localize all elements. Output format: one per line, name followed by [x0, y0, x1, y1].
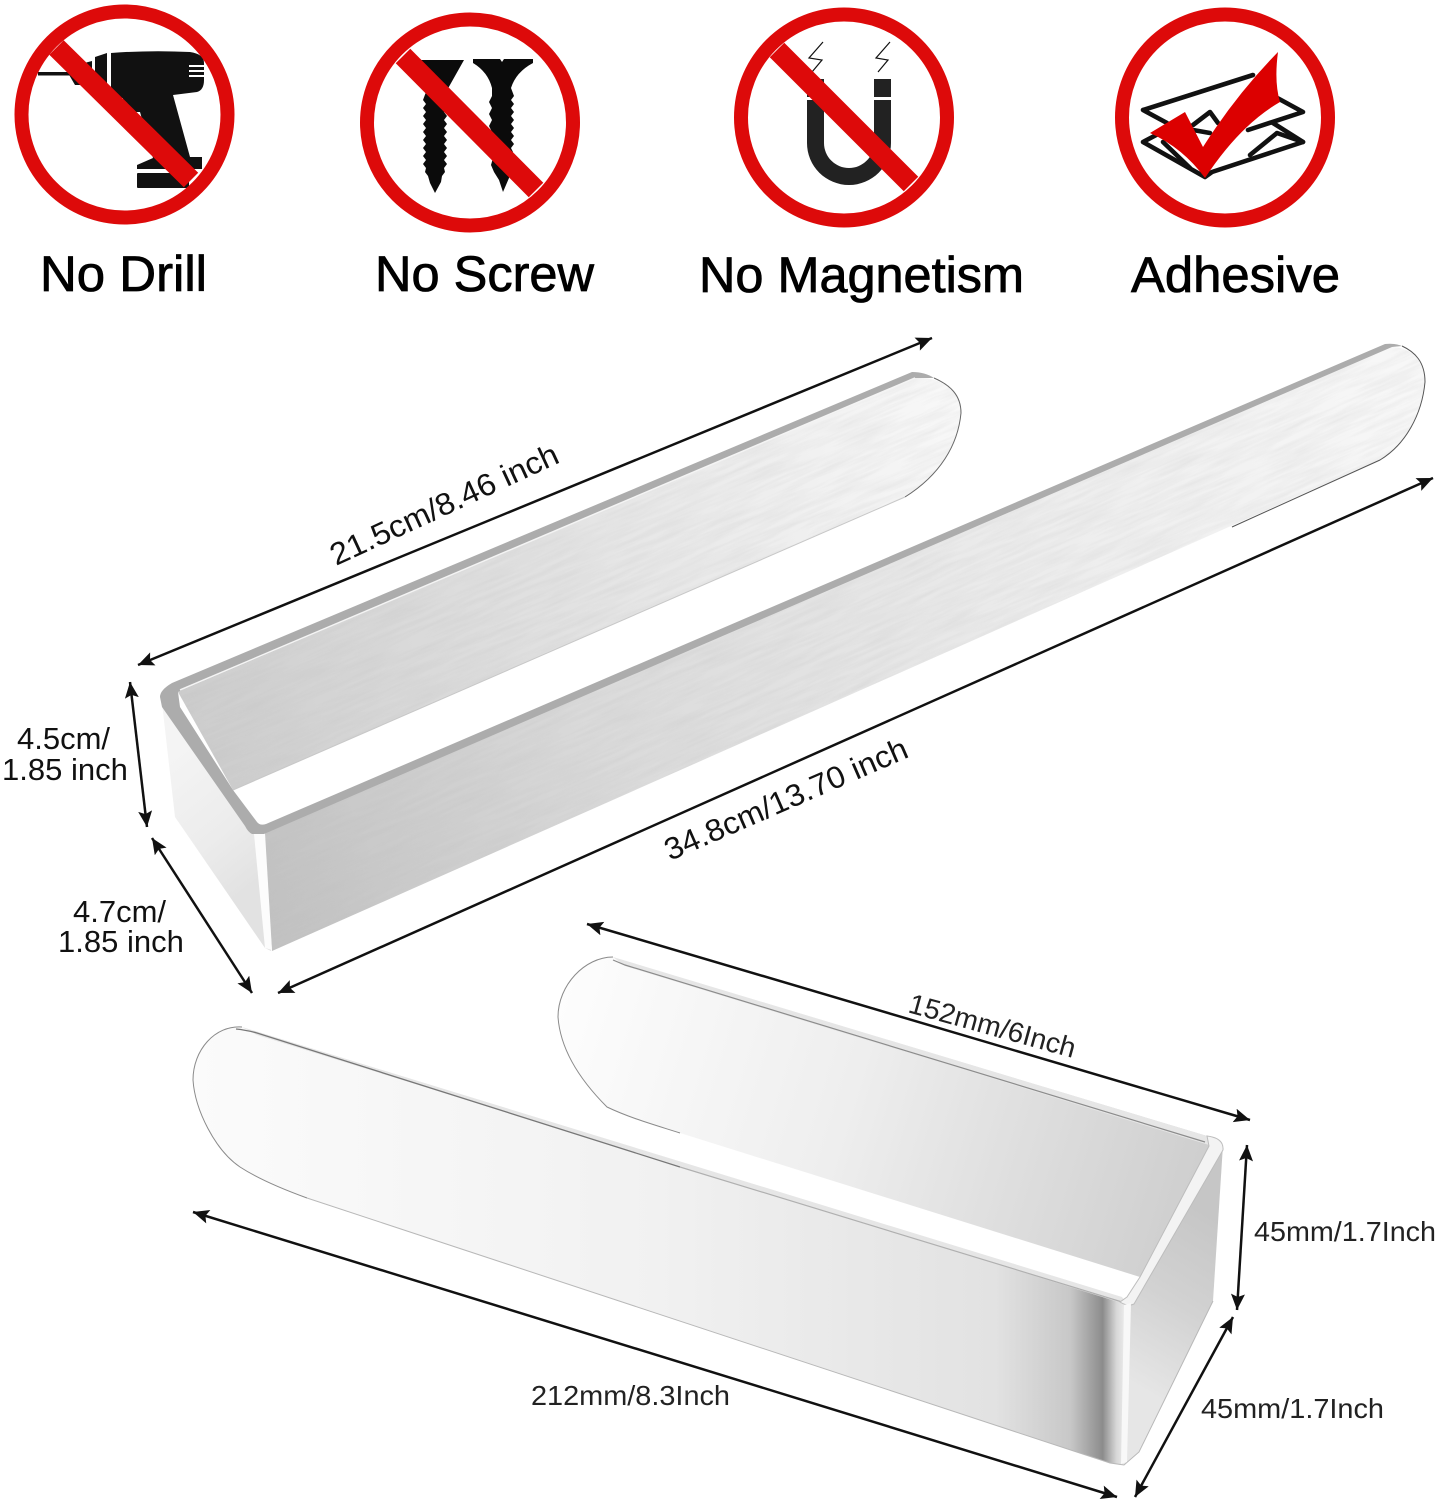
icon: no magnetism	[741, 14, 947, 220]
red ring	[1122, 14, 1328, 220]
label: No Screw: No Screw	[375, 246, 595, 302]
right rim band	[1120, 1136, 1223, 1305]
red prohibition ring	[22, 12, 228, 218]
red slash	[56, 48, 191, 180]
back plate rim	[613, 957, 1209, 1145]
red slash	[403, 56, 536, 190]
left screw	[420, 60, 464, 193]
back plate	[558, 957, 1222, 1277]
end side face	[1124, 1145, 1223, 1465]
front rim line right	[680, 1167, 1122, 1302]
arrow: 34.8cm length	[278, 478, 1433, 993]
back plate	[178, 378, 961, 790]
label: No Magnetism: No Magnetism	[699, 247, 1024, 303]
long front face	[263, 347, 1425, 951]
icon: no drill	[22, 12, 228, 218]
magnet	[807, 79, 891, 185]
label: No Drill: No Drill	[40, 246, 207, 302]
red prohibition ring	[367, 20, 573, 226]
brushed texture front face	[862, 351, 1408, 686]
dimension: 21.5cm/8.46 inch: 21.5cm/8.46 inch	[324, 437, 564, 572]
arrow: 45mm height	[1237, 1145, 1247, 1310]
back plate rim line	[613, 960, 1205, 1142]
rim	[160, 344, 1402, 834]
end side face	[162, 703, 271, 951]
front rim band	[242, 1027, 1128, 1305]
red slash	[777, 50, 911, 184]
front end outline	[1232, 346, 1425, 527]
arrow: 45mm width	[1135, 1317, 1233, 1497]
icon: no screw	[367, 20, 573, 226]
arrow: 4.5cm height	[130, 682, 147, 827]
rim highlight	[180, 378, 915, 690]
corner highlight	[254, 833, 272, 950]
right screw	[473, 59, 533, 192]
brushed texture back plate	[613, 380, 954, 589]
magnetic sparks	[809, 42, 890, 72]
dimension: 45mm/1.7Inch height: 45mm/1.7Inch	[1254, 1216, 1436, 1247]
label: Adhesive: Adhesive	[1131, 247, 1340, 303]
long front face	[193, 1027, 1127, 1465]
red prohibition ring	[741, 14, 947, 220]
product: large towel holder	[160, 344, 1426, 951]
dimension: 4.5cm/1.85 inch: 1.85 inch	[2, 752, 128, 787]
dimension: 212mm/8.3Inch: 212mm/8.3Inch	[531, 1380, 730, 1411]
arrow: 4.7cm width	[152, 838, 252, 993]
drill silhouette	[38, 51, 204, 188]
drill vents	[189, 65, 204, 77]
product: small towel holder	[193, 957, 1223, 1465]
red check mark	[1150, 52, 1280, 178]
arrow: 152mm length	[587, 924, 1250, 1120]
back plate lower edge	[233, 497, 905, 790]
back plate outline	[905, 378, 961, 497]
dimension: 4.7cm/1.85 inch: 4.7cm/	[73, 894, 166, 929]
lower edge line	[307, 1198, 1213, 1465]
icon: adhesive	[1122, 14, 1328, 220]
dimension: 45mm/1.7Inch width: 45mm/1.7Inch	[1201, 1393, 1384, 1424]
adhesive sheets	[1143, 75, 1303, 177]
dimension: 152mm/6Inch: 152mm/6Inch	[905, 988, 1079, 1064]
corner highlight	[1121, 1303, 1131, 1464]
back plate outline	[558, 957, 680, 1133]
lower edge outline	[193, 1027, 307, 1198]
dimension: 4.7cm/1.85 inch: 1.85 inch	[58, 924, 184, 959]
dimension: 4.5cm/1.85 inch: 4.5cm/	[17, 721, 110, 756]
front rim line	[236, 1029, 680, 1167]
arrow: 212mm length	[193, 1212, 1117, 1497]
arrow: 21.5cm length	[138, 338, 932, 665]
dimension: 34.8cm/13.70 inch: 34.8cm/13.70 inch	[659, 731, 913, 867]
